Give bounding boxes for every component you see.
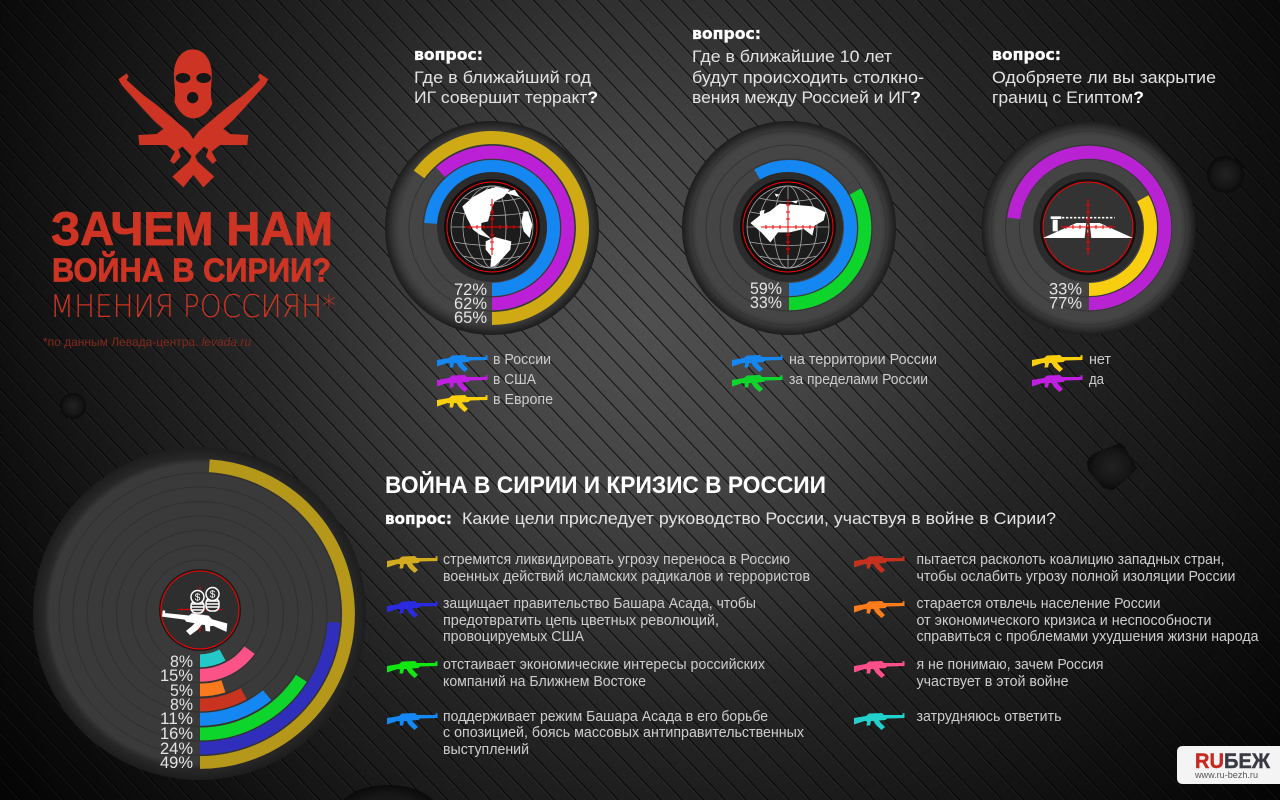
- legend: goals left column: [387, 552, 810, 758]
- question 2 text: будут происходить столкно-: [692, 68, 924, 87]
- item: do not understand: участвует в этой войне: [916, 674, 1068, 690]
- percent labels: 15%: [160, 667, 193, 685]
- percent labels: 77%: [1049, 294, 1082, 312]
- legend: question 1: в Европе: [493, 392, 553, 408]
- percent labels: 33%: [750, 294, 782, 312]
- item: distract population: старается отвлечь население России: [916, 596, 1160, 612]
- legend: question 3: [1032, 352, 1111, 392]
- question 2 text: вопрос:: [692, 24, 761, 43]
- question 3 text: вопрос:: [992, 45, 1061, 64]
- item: protect Assad government: [387, 596, 756, 645]
- chart: question 1 radial bars: [385, 121, 599, 335]
- item: distract population: от экономического кризиса и неспособности: [916, 613, 1212, 629]
- icon: coins and rifle in scope: $: [195, 592, 201, 604]
- item: protect Assad government: защищает правительство Башара Асада, чтобы: [443, 596, 756, 612]
- percent labels: [454, 281, 487, 327]
- logo: RUБЕЖ: RUБЕЖ: [1195, 750, 1271, 773]
- question 4 text: вопрос:: [385, 509, 452, 528]
- item: hard to answer: затрудняюсь ответить: [916, 709, 1062, 725]
- logo: RUБЕЖ: [1177, 746, 1280, 784]
- item: split coalition: чтобы ослабить угрозу полной изоляции России: [916, 569, 1236, 585]
- percent labels: 62%: [454, 295, 487, 313]
- item: economic interests: компаний на Ближнем Востоке: [443, 674, 646, 690]
- percent labels: 65%: [454, 309, 487, 327]
- legend: question 2: за пределами России: [789, 372, 928, 388]
- heading: war and crisis: ВОЙНА В СИРИИ И КРИЗИС В РОССИИ: [385, 471, 826, 499]
- item: economic interests: [387, 657, 766, 690]
- panel: question 2: [682, 24, 937, 392]
- panel: question 1: [385, 45, 599, 412]
- question 2 text: Где в ближайшие 10 лет: [692, 47, 892, 66]
- legend: question 3: да: [1089, 372, 1105, 388]
- item: terror threat: [387, 552, 810, 585]
- item: support Assad regime: поддерживает режим Башара Асада в его борьбе: [443, 709, 768, 725]
- item: terror threat: стремится ликвидировать угрозу переноса в Россию: [443, 552, 790, 568]
- panel: question 3: [982, 45, 1216, 392]
- legend: question 1: [437, 352, 553, 412]
- title: [50, 202, 336, 325]
- chart: goals radial bars: [33, 447, 366, 780]
- percent labels: 72%: [454, 281, 487, 299]
- title: МНЕНИЯ РОССИЯН*: [50, 289, 336, 325]
- legend: question 1: в США: [493, 372, 536, 388]
- item: economic interests: отстаивает экономические интересы российских: [443, 657, 766, 673]
- item: protect Assad government: провоцируемых США: [443, 629, 584, 645]
- question 3 text: [992, 45, 1216, 107]
- title: ВОЙНА В СИРИИ?: [52, 250, 331, 290]
- percent labels: [750, 280, 782, 312]
- percent labels: 5%: [170, 682, 193, 700]
- icon: masked head and crossed rifles: [118, 49, 268, 187]
- percent labels: 33%: [1049, 280, 1082, 298]
- decorative bullet holes: [60, 156, 1244, 800]
- item: split coalition: [854, 552, 1236, 585]
- item: hard to answer: [854, 709, 1062, 730]
- legend: question 2: [732, 352, 937, 392]
- logo: RUБЕЖ: www.ru-bezh.ru: [1194, 770, 1258, 781]
- percent labels: 16%: [160, 725, 193, 743]
- item: support Assad regime: с опозицией, боясь массовых антиправительственных: [443, 725, 805, 741]
- item: distract population: [854, 596, 1259, 645]
- icon: coins and rifle in scope: [159, 569, 241, 651]
- percent labels: 49%: [160, 754, 193, 772]
- item: terror threat: военных действий исламских радикалов и террористов: [443, 569, 810, 585]
- icon: coins and rifle in scope: $: [210, 590, 216, 600]
- item: protect Assad government: предотвратить цепь цветных революций,: [443, 613, 719, 629]
- legend: question 1: в России: [493, 352, 551, 368]
- legend: goals right column: [854, 552, 1259, 730]
- icon: globe with Russia: [743, 182, 833, 272]
- question 2 text: вения между Россией и ИГ ?: [692, 88, 921, 107]
- question 2 text: [692, 24, 924, 107]
- percent labels: 59%: [750, 280, 782, 298]
- question 1 text: ИГ совершит терракт ?: [414, 88, 598, 107]
- chart: question 3 radial bars: [982, 121, 1196, 335]
- item: do not understand: [854, 657, 1104, 690]
- question 1 text: [414, 45, 598, 107]
- question 4 text: Какие цели приследует руководство России, участвуя в войне в Сирии?: [462, 509, 1056, 528]
- percent labels: [1049, 280, 1082, 312]
- legend: question 3: нет: [1089, 352, 1111, 368]
- icon: globe with Americas: [447, 182, 537, 272]
- percent labels: 8%: [170, 653, 193, 671]
- question 3 text: границ с Египтом ?: [992, 88, 1144, 107]
- percent labels: 11%: [160, 710, 193, 728]
- item: support Assad regime: [387, 709, 805, 758]
- percent labels: [160, 653, 193, 772]
- percent labels: 8%: [170, 696, 193, 714]
- title: ЗАЧЕМ НАМ: [51, 202, 333, 255]
- question 3 text: Одобряете ли вы закрытие: [992, 68, 1216, 87]
- legend: question 2: на территории России: [789, 352, 937, 368]
- icon: border checkpoint in scope: [1043, 182, 1133, 272]
- item: split coalition: пытается расколоть коалицию западных стран,: [916, 552, 1224, 568]
- item: support Assad regime: выступлений: [443, 742, 529, 758]
- question 1 text: вопрос:: [414, 45, 483, 64]
- source note: *по данным Левада-центра. levada.ru: [43, 335, 251, 349]
- question 1 text: Где в ближайший год: [414, 68, 591, 87]
- percent labels: 24%: [160, 740, 193, 758]
- item: do not understand: я не понимаю, зачем Россия: [916, 657, 1104, 673]
- item: distract population: справиться с проблемами ухудшения жизни народа: [916, 629, 1259, 645]
- chart: question 2 radial bars: [682, 121, 896, 335]
